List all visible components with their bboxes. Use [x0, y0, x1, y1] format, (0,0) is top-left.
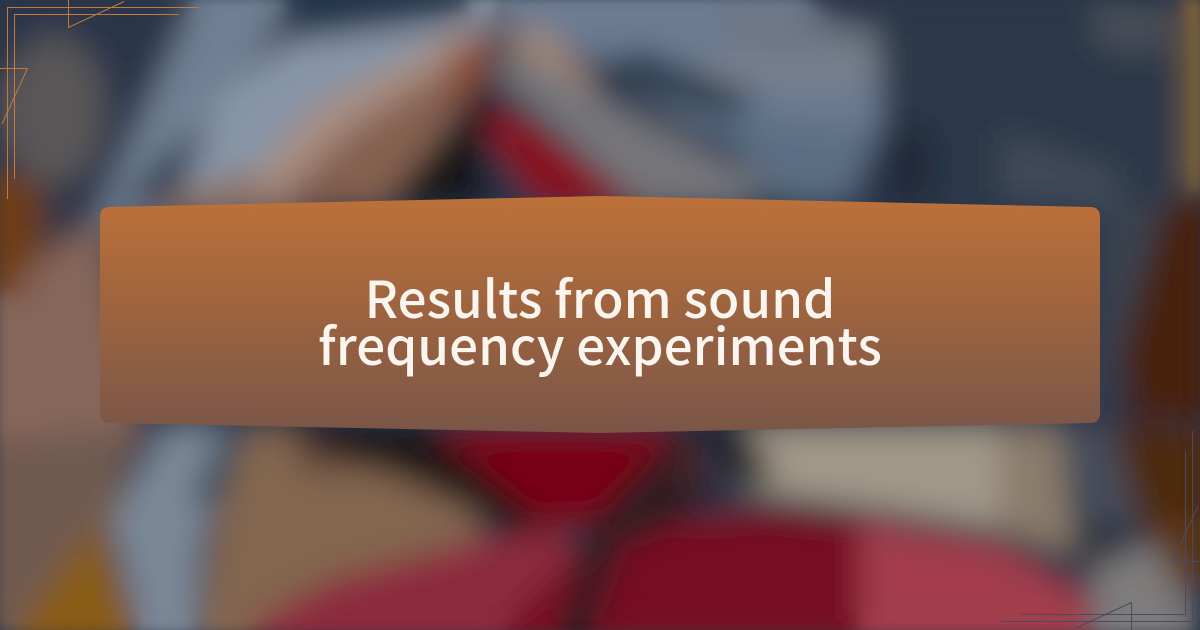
title panel [100, 196, 1100, 433]
title: Results from sound [365, 259, 835, 333]
bottom-right corner decoration [1001, 431, 1200, 630]
title [318, 259, 882, 380]
top-left corner decoration [0, 0, 199, 199]
title: frequency experiments [318, 306, 882, 380]
